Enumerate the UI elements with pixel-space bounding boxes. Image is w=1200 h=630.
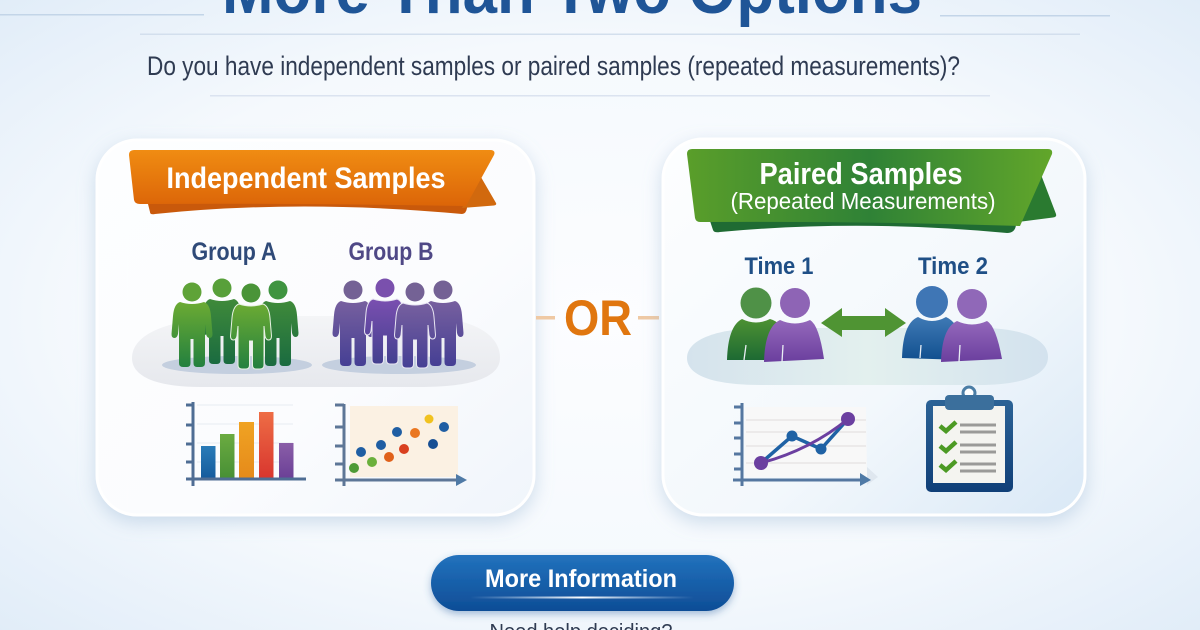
panel: independent samples: [97, 140, 534, 515]
more information button: [431, 555, 734, 611]
group B people: [322, 278, 476, 374]
group A label: Group A: [192, 238, 276, 266]
orange banner: [129, 150, 496, 214]
group A people: [162, 278, 312, 374]
bar chart: [186, 402, 306, 486]
double arrow: [821, 308, 906, 337]
time 2 people: [902, 286, 1002, 362]
icon: clipboard checklist: [926, 387, 1013, 492]
green banner: (Repeated Measurements): [730, 188, 996, 214]
time 2 label: Time 2: [918, 253, 988, 280]
subtitle question: Do you have independent samples or paired samples (repeated measurements)?: [147, 51, 960, 81]
more information button: More Information: [485, 565, 677, 593]
green banner: Paired Samples: [760, 156, 962, 191]
scatter chart: [335, 404, 467, 486]
line chart: [733, 403, 878, 486]
green banner: [687, 149, 1056, 233]
grey platform: [132, 316, 500, 387]
panel: paired samples: [663, 139, 1085, 515]
time 1 label: Time 1: [744, 253, 814, 280]
OR divider: OR: [564, 290, 632, 346]
blue platform: [687, 328, 1048, 385]
OR divider: [536, 290, 659, 346]
group B label: Group B: [348, 238, 434, 266]
time 1 people: [727, 288, 824, 362]
orange banner: Independent Samples: [166, 162, 446, 195]
